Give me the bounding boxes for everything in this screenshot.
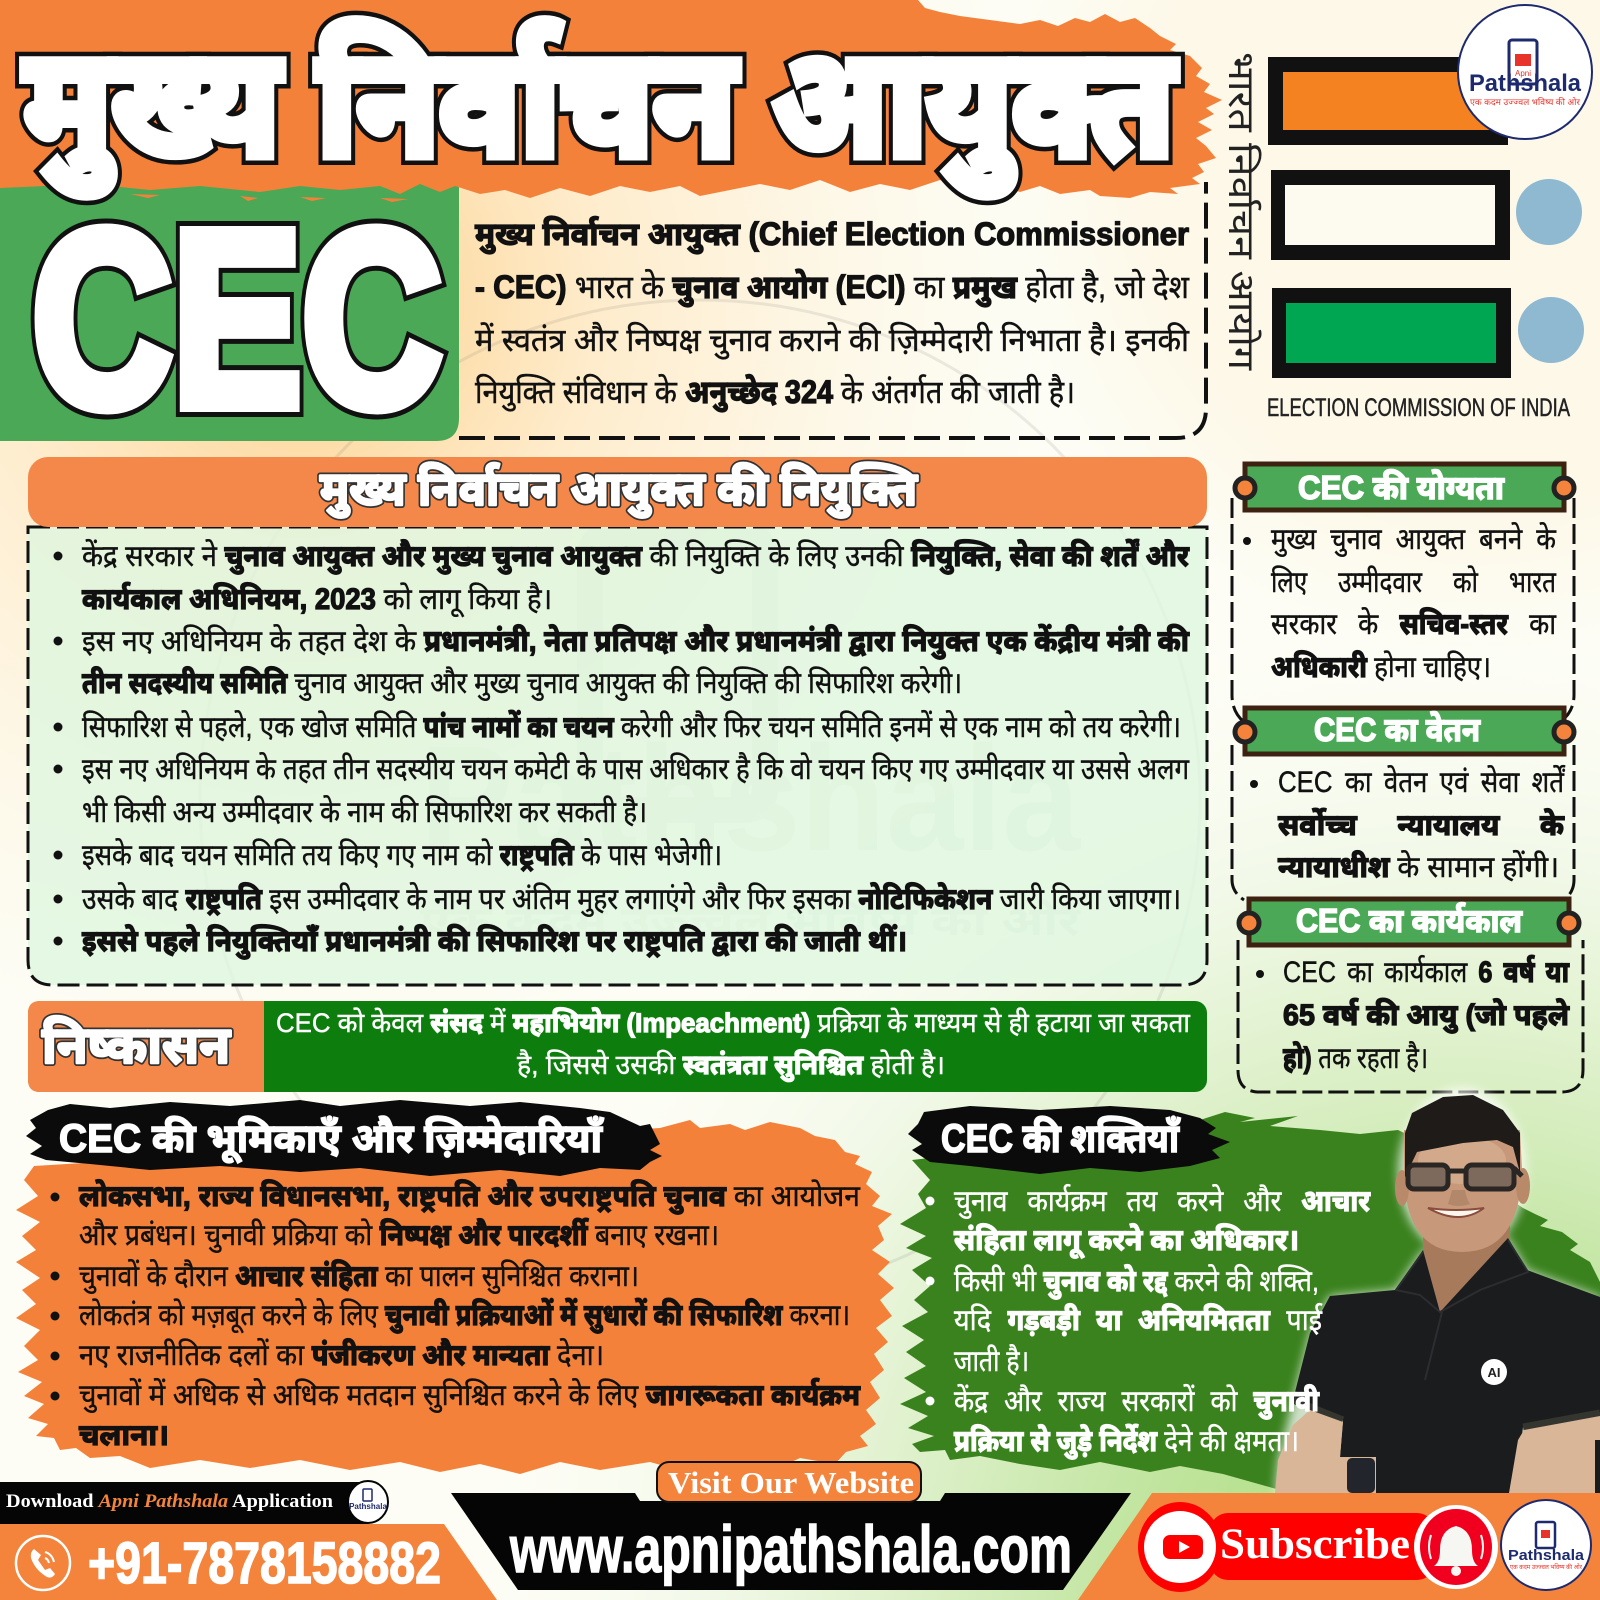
tenure heading — [1239, 899, 1579, 945]
footer: download strip: Download Apni Pathshala Application — [6, 1491, 333, 1512]
appointment bullets: केंद्र सरकार ने चुनाव आयुक्त और मुख्य चुनाव आयुक्त की नियुक्ति के लिए उनकी नियुक्ति, सेवा की शर्तें और — [82, 538, 1190, 575]
panel: salary — [1232, 708, 1574, 900]
footer: subscribe — [1078, 1493, 1600, 1600]
title: मुख्य निर्वाचन आयुक्त — [24, 19, 1177, 196]
watermark — [200, 300, 1200, 1300]
icon: bell — [1414, 1505, 1498, 1589]
panel: roles — [16, 1100, 894, 1476]
salary heading: CEC का वेतन — [1314, 710, 1481, 748]
watermark: एक कदम उज्ज्वल भविष्य की ओर — [420, 899, 1082, 944]
logo: Apni Pathshala top — [1458, 5, 1592, 139]
powers bullets: यदि गड़बड़ी या अनियमितता पाई — [954, 1303, 1323, 1337]
panel: salary: न्यायाधीश के सामान होंगी। — [1278, 849, 1559, 884]
footer: website — [451, 1493, 1131, 1590]
appointment bullets: उसके बाद राष्ट्रपति इस उम्मीदवार के नाम पर अंतिम मुहर लगाएंगे और फिर इसका नोटिफिकेशन जारी किया जाएगा। — [82, 881, 1181, 917]
appointment bullets — [54, 538, 1190, 960]
logo: footer: एक कदम उज्ज्वल भविष्य की ओर — [1510, 1563, 1583, 1571]
powers bullets: केंद्र और राज्य सरकारों को चुनावी — [954, 1384, 1320, 1420]
logo: Apni Pathshala top: Pathshala — [1469, 70, 1582, 97]
roles bullets: चलाना। — [79, 1419, 169, 1452]
powers bullets: संहिता लागू करने का अधिकार। — [954, 1222, 1299, 1259]
logo: small: Pathshala — [349, 1502, 387, 1511]
title brush banner — [0, 0, 1222, 202]
salary heading — [1235, 708, 1574, 754]
panel: removal: निष्कासन — [42, 1017, 231, 1075]
roles bullets: चुनावों के दौरान आचार संहिता का पालन सुनिश्चित कराना। — [79, 1258, 639, 1294]
panel: CEC badge: CEC — [32, 179, 442, 458]
intro text: मुख्य निर्वाचन आयुक्त (Chief Election Commissioner — [475, 216, 1189, 254]
qualification heading: CEC की योग्यता — [1298, 469, 1505, 506]
footer: phone — [0, 1524, 497, 1600]
appointment bullets: इससे पहले नियुक्तियाँ प्रधानमंत्री की सिफारिश पर राष्ट्रपति द्वारा की जाती थीं। — [82, 923, 907, 960]
footer: website: www.apnipathshala.com — [509, 1512, 1072, 1586]
panel: tenure: CEC का कार्यकाल 6 वर्ष या — [1283, 955, 1570, 989]
powers bullets: प्रक्रिया से जुड़े निर्देश देने की क्षमता। — [954, 1423, 1299, 1460]
roles bullets: चुनावों में अधिक से अधिक मतदान सुनिश्चित करने के लिए जागरूकता कार्यक्रम — [79, 1377, 860, 1413]
panel: qualification: मुख्य चुनाव आयुक्त बनने के — [1271, 521, 1557, 557]
panel: tenure — [1238, 899, 1583, 1092]
footer: phone: +91-7878158882 — [88, 1531, 441, 1596]
appointment heading: मुख्य निर्वाचन आयुक्त की नियुक्ति — [320, 462, 918, 517]
powers bullets — [926, 1183, 1371, 1460]
panel: removal: निष्कासन — [42, 1017, 231, 1075]
panel: tenure: हो) तक रहता है। — [1283, 1040, 1428, 1075]
appointment bullets: भी किसी अन्य उम्मीदवार के नाम की सिफारिश कर सकती है। — [82, 794, 647, 829]
appointment bullets: इस नए अधिनियम के तहत देश के प्रधानमंत्री, नेता प्रतिपक्ष और प्रधानमंत्री द्वारा नियुक्त एक केंद्रीय मंत्री की — [82, 623, 1190, 660]
roles bullets: लोकतंत्र को मज़बूत करने के लिए चुनावी प्रक्रियाओं में सुधारों की सिफारिश करना। — [79, 1297, 850, 1334]
roles bullets: लोकसभा, राज्य विधानसभा, राष्ट्रपति और उपराष्ट्रपति चुनाव का आयोजन — [79, 1179, 861, 1215]
visit button: Visit Our Website — [668, 1465, 914, 1500]
roles bullets: और प्रबंधन। चुनावी प्रक्रिया को निष्पक्ष और पारदर्शी बनाए रखना। — [79, 1218, 719, 1253]
appointment bullets: तीन सदस्यीय समिति चुनाव आयुक्त और मुख्य चुनाव आयुक्त की नियुक्ति की सिफारिश करेगी। — [82, 665, 962, 701]
roles heading: CEC की भूमिकाएँ और ज़िम्मेदारियाँ — [59, 1116, 604, 1163]
emblem: Election Commission of India: भारत निर्वाचन आयोग — [1221, 52, 1262, 371]
footer: download strip — [0, 1481, 388, 1524]
logo: Apni Pathshala top: एक कदम उज्ज्वल भविष्य की ओर — [1470, 96, 1580, 107]
intro dashed box — [459, 182, 1206, 438]
intro text: में स्वतंत्र और निष्पक्ष चुनाव कराने की ज़िम्मेदारी निभाता है। इनकी — [475, 322, 1190, 360]
roles bullets — [50, 1179, 861, 1452]
appointment heading: मुख्य निर्वाचन आयुक्त की नियुक्ति — [320, 462, 918, 517]
panel: salary: सर्वोच्च न्यायालय के — [1278, 807, 1565, 842]
powers bullets: जाती है। — [954, 1343, 1029, 1378]
person portrait: AI — [1488, 1365, 1500, 1380]
title: मुख्य निर्वाचन आयुक्त — [24, 19, 1177, 196]
panel: tenure: 65 वर्ष की आयु (जो पहले — [1283, 997, 1570, 1034]
roles heading — [26, 1100, 662, 1176]
panel: qualification — [1232, 464, 1574, 722]
panel: CEC badge: CEC — [32, 179, 442, 458]
powers bullets: चुनाव कार्यक्रम तय करने और आचार — [954, 1183, 1371, 1219]
panel: removal — [28, 1001, 1207, 1092]
powers heading: CEC की शक्तियाँ — [941, 1116, 1181, 1161]
logo: Apni Pathshala top: Apni — [1515, 69, 1531, 78]
powers bullets: किसी भी चुनाव को रद्द करने की शक्ति, — [954, 1263, 1319, 1300]
appointment bullets: इस नए अधिनियम के तहत तीन सदस्यीय चयन कमेटी के पास अधिकार है कि वो चयन किए गए उम्मीदवार या उससे अलग — [82, 751, 1190, 786]
person portrait — [1275, 1088, 1600, 1493]
panel: removal: CEC को केवल संसद में महाभियोग (Impeachment) प्रक्रिया के माध्यम से ही हटाया जा सकता — [276, 1007, 1191, 1038]
qualification heading — [1235, 464, 1574, 510]
appointment bullets: सिफारिश से पहले, एक खोज समिति पांच नामों का चयन करेगी और फिर चयन समिति इनमें से एक नाम को तय करेगी। — [82, 709, 1181, 744]
intro text: - CEC) भारत के चुनाव आयोग (ECI) का प्रमुख होता है, जो देश — [475, 269, 1190, 307]
footer: subscribe: Subscribe — [1220, 1521, 1410, 1568]
powers heading — [908, 1106, 1230, 1174]
logo: footer: Pathshala — [1508, 1547, 1585, 1564]
watermark: Pathshala — [420, 714, 1081, 882]
panel: removal: है, जिससे उसकी स्वतंत्रता सुनिश्चित होती है। — [517, 1049, 945, 1081]
appointment bullets: इसके बाद चयन समिति तय किए गए नाम को राष्ट्रपति के पास भेजेगी। — [82, 837, 722, 873]
panel: qualification: सरकार के सचिव-स्तर का — [1271, 606, 1557, 641]
panel: qualification: अधिकारी होना चाहिए। — [1271, 650, 1491, 684]
panel: appointment — [28, 457, 1207, 985]
appointment bullets: कार्यकाल अधिनियम, 2023 को लागू किया है। — [82, 581, 552, 618]
roles bullets: नए राजनीतिक दलों का पंजीकरण और मान्यता देना। — [79, 1337, 604, 1372]
intro text — [475, 216, 1190, 412]
logo: small — [348, 1481, 388, 1523]
intro text: नियुक्ति संविधान के अनुच्छेद 324 के अंतर्गत की जाती है। — [475, 374, 1075, 412]
emblem: Election Commission of India — [1221, 52, 1584, 422]
tenure heading: CEC का कार्यकाल — [1296, 902, 1523, 939]
panel: powers — [900, 1106, 1600, 1490]
logo: footer — [1501, 1500, 1591, 1590]
appointment heading — [28, 457, 1207, 527]
panel: salary: CEC का वेतन एवं सेवा शर्तें — [1278, 764, 1566, 799]
